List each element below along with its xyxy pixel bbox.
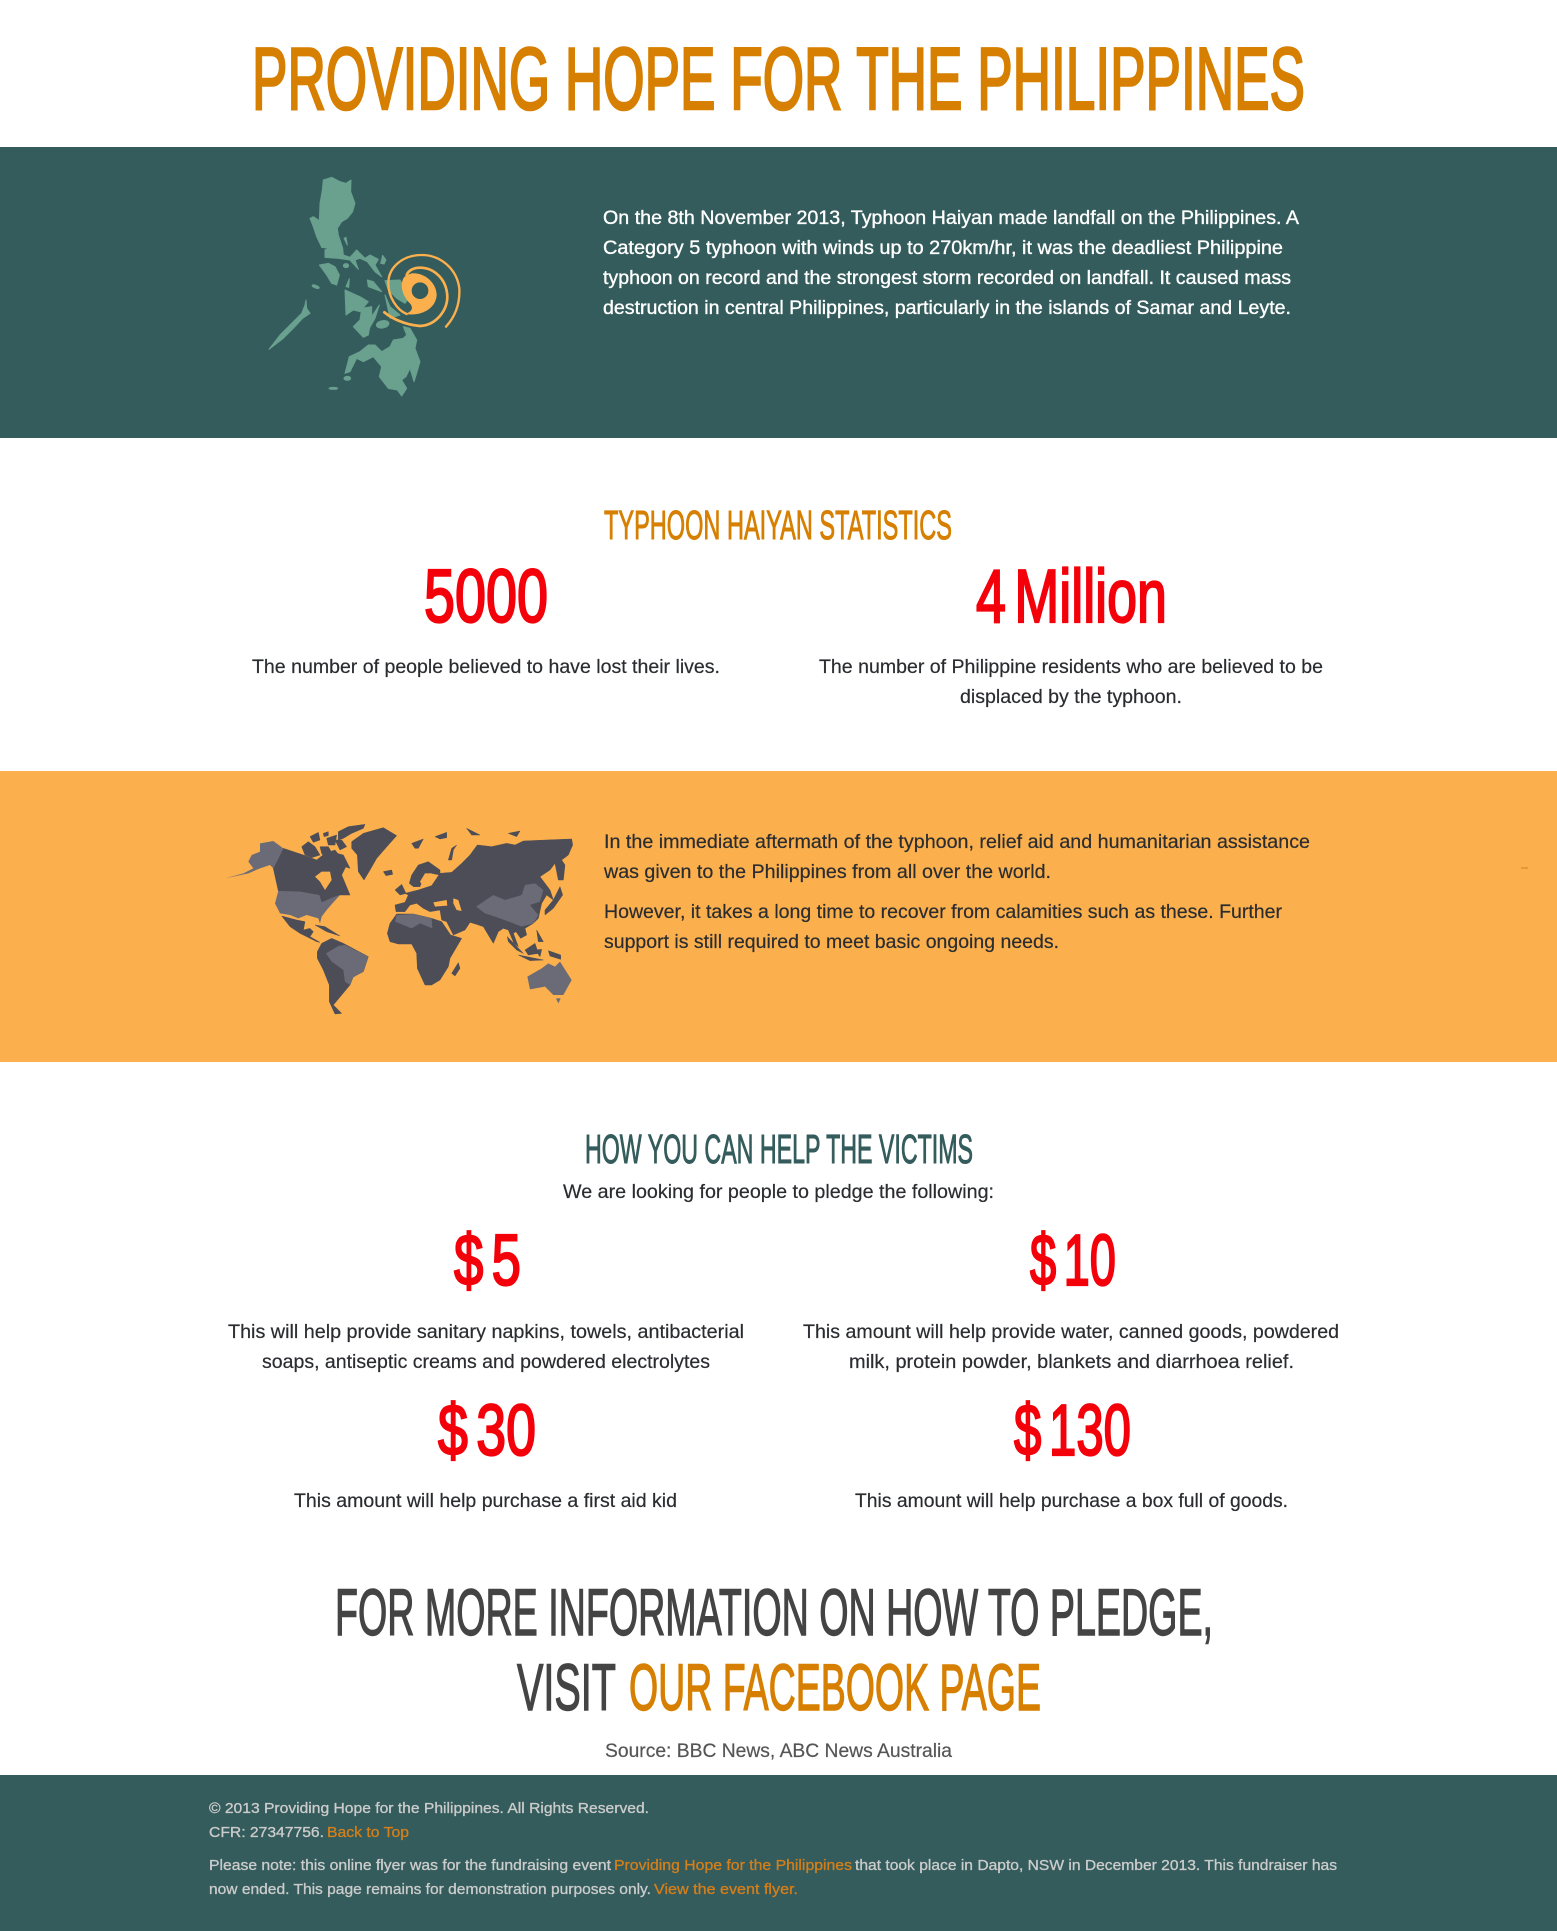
stat: deaths	[252, 554, 720, 678]
call to action	[335, 1575, 1213, 1724]
panel: footer: View the event flyer.	[654, 1881, 798, 1898]
pledge: $130: $ 130	[1014, 1391, 1131, 1471]
intro text: On the 8th November 2013, Typhoon Haiyan made landfall on the Philippines. A	[603, 207, 1299, 229]
pledge: $10	[803, 1221, 1339, 1373]
stat: displaced: The number of Philippine residents who are believed to be	[819, 656, 1323, 678]
panel: typhoon intro	[0, 147, 1557, 438]
panel: world aid	[0, 771, 1557, 1062]
stat: displaced: displaced by the typhoon.	[960, 686, 1182, 708]
aid text: was given to the Philippines from all over the world.	[603, 861, 1051, 883]
call to action: VISIT	[517, 1650, 616, 1724]
panel: footer: © 2013 Providing Hope for the Philippines. All Rights Reserved.	[209, 1800, 649, 1817]
heading: TYPHOON HAIYAN STATISTICS	[604, 502, 952, 548]
stat: displaced	[819, 554, 1323, 708]
stat: deaths: The number of people believed to have lost their lives.	[252, 656, 720, 678]
panel: footer: now ended. This page remains for demonstration purposes only.	[209, 1881, 651, 1898]
aid text: In the immediate aftermath of the typhoon, relief aid and humanitarian assistance	[604, 831, 1310, 853]
stat: deaths: 5000	[424, 554, 548, 638]
aid text: support is still required to meet basic ongoing needs.	[604, 931, 1059, 953]
aid text	[603, 831, 1310, 953]
panel: footer: CFR: 27347756.	[209, 1824, 324, 1841]
pledge: $30: This amount will help purchase a first aid kid	[294, 1490, 677, 1512]
icon: map of the Philippines with typhoon	[269, 177, 459, 396]
pledge: $5	[228, 1221, 744, 1373]
panel: footer: that took place in Dapto, NSW in December 2013. This fundraiser has	[855, 1857, 1337, 1874]
intro text: Category 5 typhoon with winds up to 270km/hr, it was the deadliest Philippine	[603, 237, 1283, 259]
call to action: OUR FACEBOOK PAGE	[629, 1650, 1041, 1724]
pledge: $5: soaps, antiseptic creams and powdered electrolytes	[262, 1351, 710, 1373]
source: Source: BBC News, ABC News Australia	[605, 1740, 952, 1762]
intro text: destruction in central Philippines, particularly in the islands of Samar and Leyte.	[603, 297, 1291, 319]
pledge: $10: $ 10	[1030, 1221, 1116, 1301]
pledge: $5: $ 5	[454, 1221, 521, 1301]
panel: footer	[0, 1775, 1557, 1931]
pledge: $130: This amount will help purchase a box full of goods.	[855, 1490, 1288, 1512]
panel: footer: Back to Top	[327, 1824, 409, 1841]
panel: footer: Please note: this online flyer was for the fundraising event	[209, 1857, 612, 1874]
aid text: However, it takes a long time to recover from calamities such as these. Further	[604, 901, 1283, 923]
pledge: $30	[294, 1391, 677, 1512]
pledge: $10: This amount will help provide water, canned goods, powdered	[803, 1321, 1339, 1343]
panel: footer: Providing Hope for the Philippines	[614, 1857, 852, 1874]
pledge: $10: milk, protein powder, blankets and diarrhoea relief.	[849, 1351, 1294, 1373]
panel: typhoon statistics	[252, 502, 1323, 708]
intro text	[603, 207, 1299, 319]
panel: how you can help	[228, 1126, 1339, 1512]
heading: HOW YOU CAN HELP THE VICTIMS	[585, 1126, 973, 1172]
pledge: $5: This will help provide sanitary napkins, towels, antibacterial	[228, 1321, 744, 1343]
pledge: $130	[855, 1391, 1288, 1512]
intro text: typhoon on record and the strongest storm recorded on landfall. It caused mass	[603, 267, 1291, 289]
icon: world map	[225, 824, 573, 1014]
stat: displaced: 4 Million	[976, 554, 1167, 638]
pledge: $30: $ 30	[438, 1391, 536, 1471]
intro line: We are looking for people to pledge the following:	[563, 1181, 994, 1203]
